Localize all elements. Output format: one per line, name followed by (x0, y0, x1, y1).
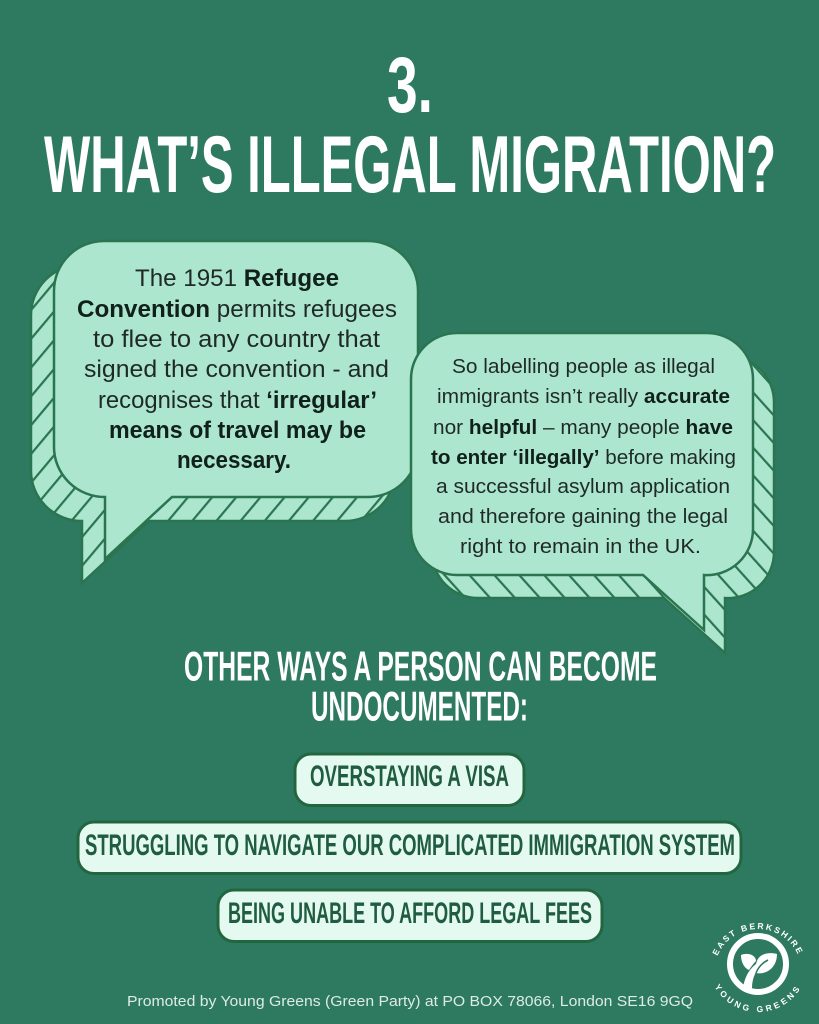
text: labelling people: and therefore gaining the legal (438, 505, 728, 528)
panel: left speech bubble (31, 241, 418, 583)
panel: right speech bubble (411, 333, 774, 653)
logo: East Berkshire Young Greens (712, 923, 803, 1012)
subheading (184, 642, 657, 730)
text: refugee convention: necessary. (177, 447, 291, 474)
pill: legal fees (218, 890, 602, 942)
pill: overstaying a visa: OVERSTAYING A VISA (310, 760, 509, 793)
hatched bubble shadow left (31, 265, 395, 583)
subheading: UNDOCUMENTED: (311, 682, 528, 730)
text: labelling people: right to remain in the UK. (460, 535, 701, 558)
text: refugee convention: to flee to any country that (93, 326, 380, 353)
text: labelling people: immigrants isn’t really accurate (437, 385, 730, 408)
bubble body right (411, 333, 753, 630)
icon: sprout (741, 953, 777, 988)
text: labelling people: a successful asylum application (436, 475, 730, 498)
text: refugee convention: The 1951 Refugee (135, 265, 339, 292)
logo text: EAST BERKSHIRE (712, 923, 803, 956)
icon: ring (730, 936, 786, 992)
pill: immigration system (78, 822, 741, 874)
logo text: YOUNG GREENS (716, 984, 800, 1012)
footer: Promoted by Young Greens (Green Party) at PO BOX 78066, London SE16 9GQ (127, 993, 693, 1010)
hatched bubble shadow right (432, 356, 774, 653)
pill: overstaying a visa (295, 754, 524, 806)
logo text (712, 923, 803, 1012)
text: refugee convention: signed the convention - and (84, 356, 389, 383)
bubble body left (54, 241, 418, 559)
text: refugee convention: recognises that ‘irregular’ (98, 387, 377, 414)
text: labelling people (431, 355, 736, 558)
text: labelling people: So labelling people as illegal (452, 355, 715, 378)
title: 3. (387, 40, 433, 129)
text: labelling people: to enter ‘illegally’ before making (431, 446, 736, 469)
text: refugee convention: Convention permits refugees (77, 296, 397, 323)
text: refugee convention: means of travel may be (109, 417, 366, 444)
title (44, 40, 776, 210)
text: labelling people: nor helpful – many people have (433, 416, 733, 439)
pill: legal fees: BEING UNABLE TO AFFORD LEGAL FEES (228, 897, 592, 930)
text: refugee convention (77, 265, 397, 474)
